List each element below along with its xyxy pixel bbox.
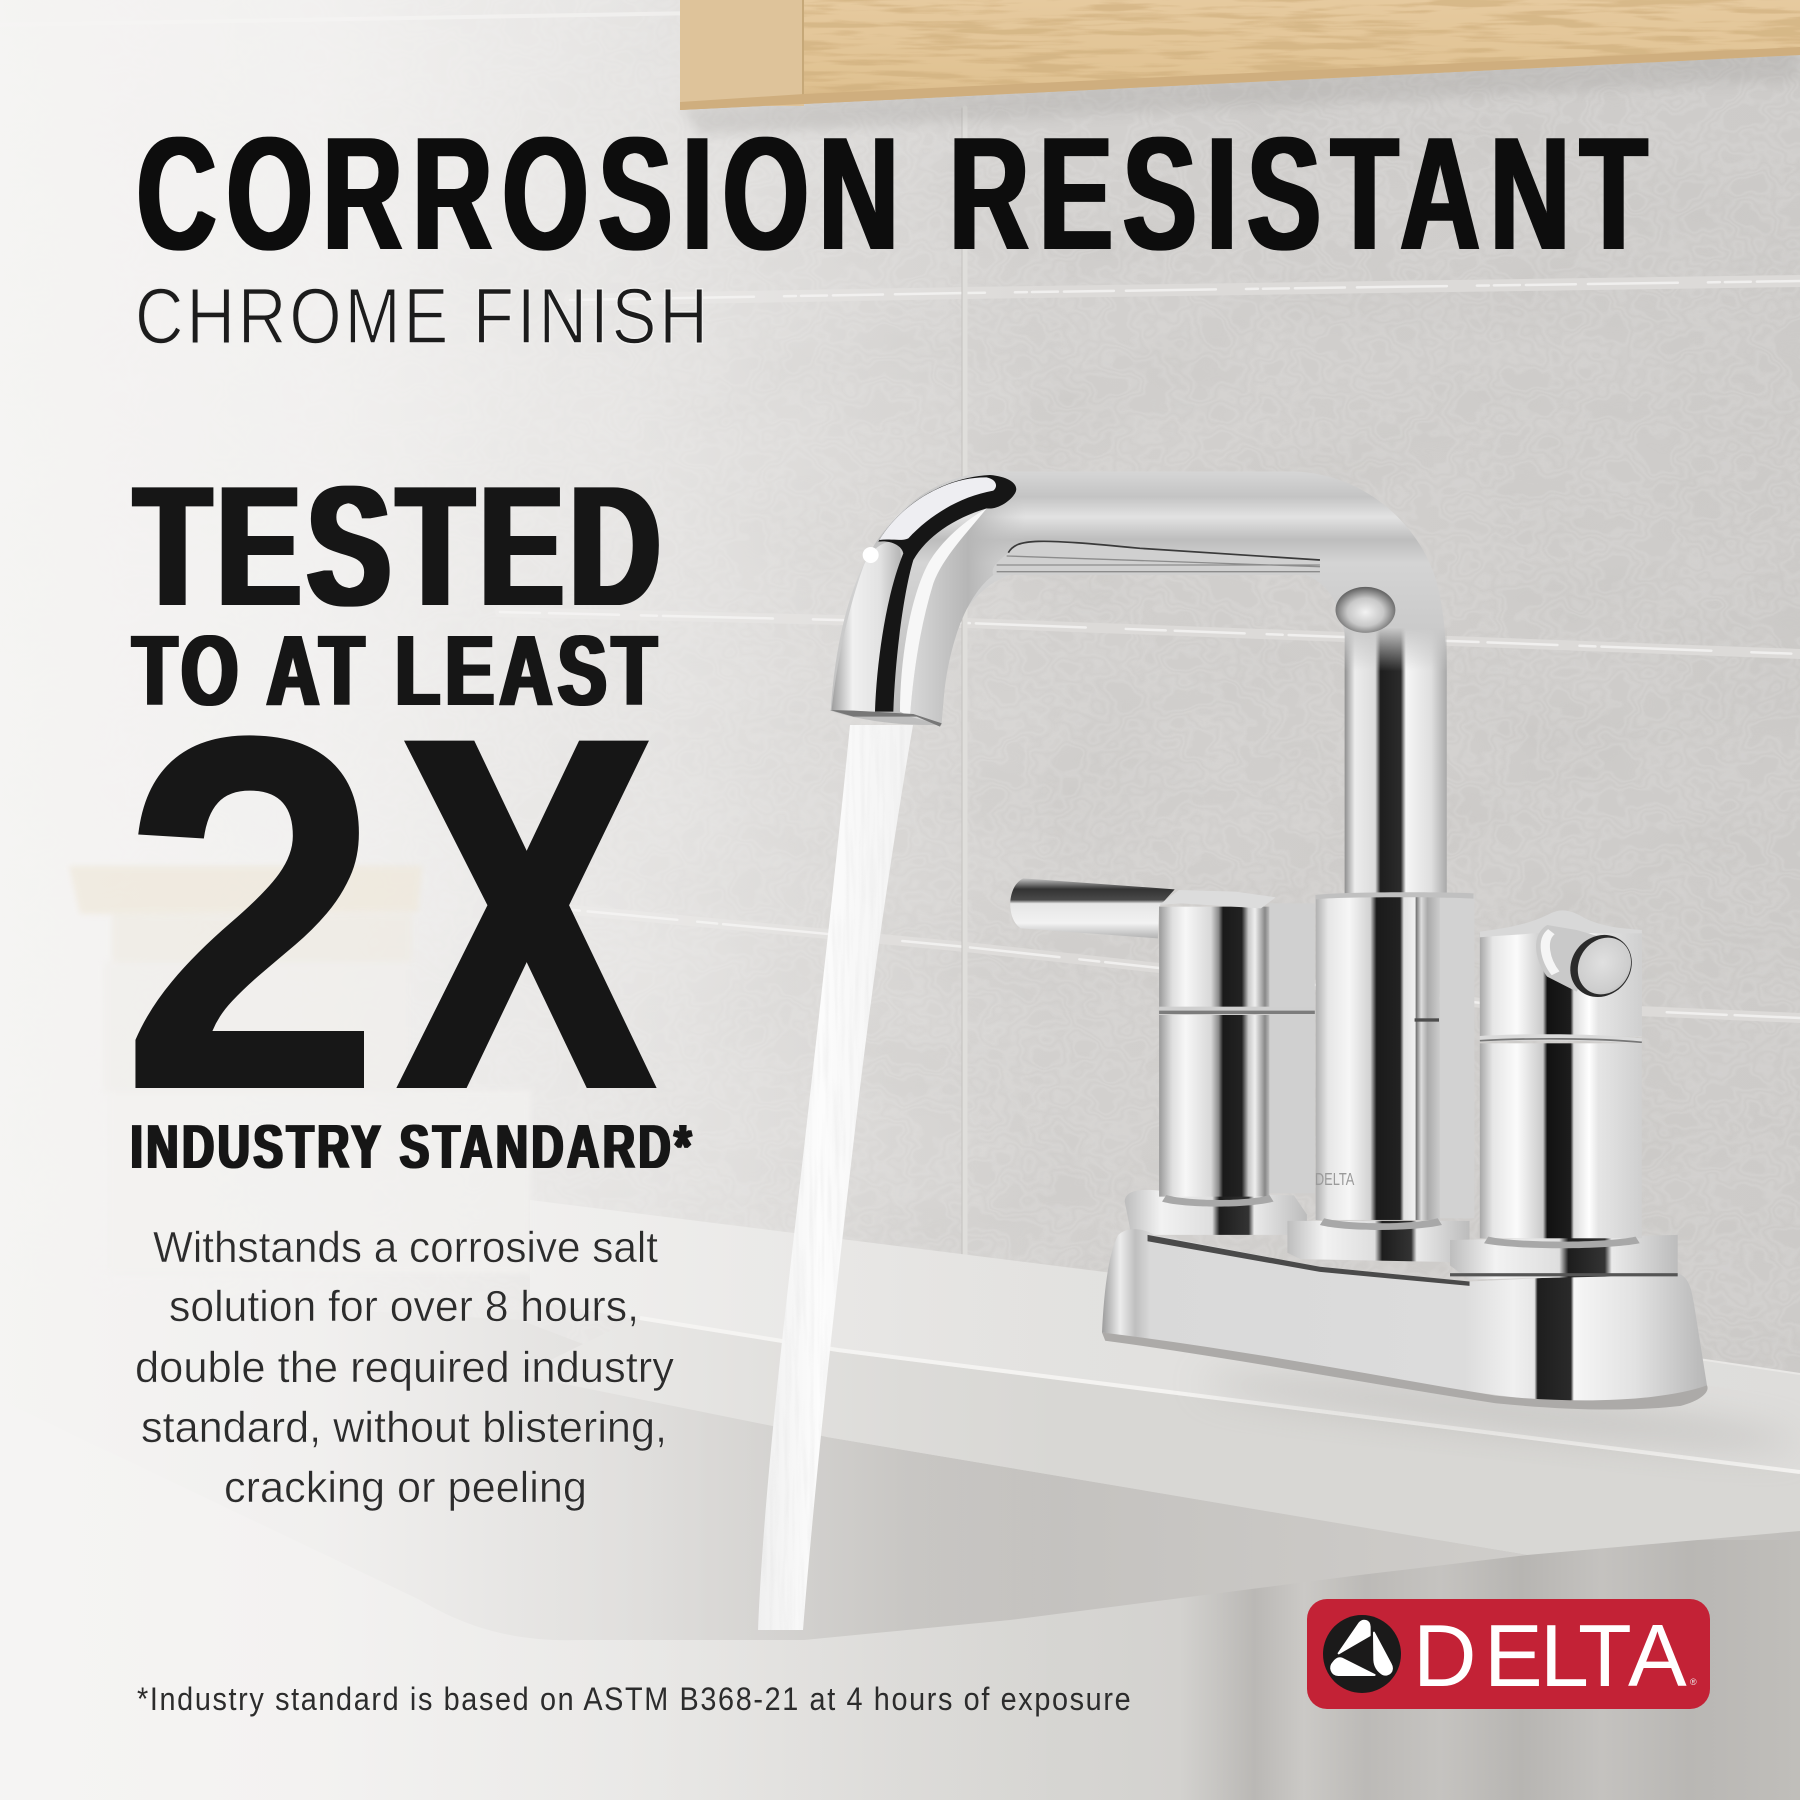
left handle xyxy=(1010,878,1315,1207)
soft fade over left side xyxy=(0,0,1060,1800)
claim: tested to at least 2x industry standard xyxy=(119,450,692,1195)
claim figure: 2: 2 xyxy=(119,630,383,1195)
subtitle: chrome finish: CHROME FINISH xyxy=(135,272,708,360)
jar and box in soft focus xyxy=(69,866,531,1274)
handles and centre body xyxy=(1010,878,1642,1248)
wood cabinet xyxy=(680,0,1800,135)
water stream xyxy=(750,725,920,1630)
description text: solution for over 8 hours, xyxy=(169,1282,639,1331)
claim figure: X: X xyxy=(399,631,656,1195)
engraved DELTA mark: DELTA xyxy=(1315,1169,1355,1189)
right handle xyxy=(1480,910,1642,1248)
claim line: industry standard: INDUSTRY STANDARD* xyxy=(130,1113,692,1182)
title: corrosion resistant: CORROSION RESISTANT xyxy=(136,105,1648,284)
description text: Withstands a corrosive salt xyxy=(153,1223,658,1272)
faucet xyxy=(830,471,1708,1410)
background: bathroom wall xyxy=(0,0,1800,1400)
footnote: *Industry standard is based on ASTM B368-21 at 4 hours of exposure xyxy=(137,1682,1131,1717)
claim line: to at least: TO AT LEAST xyxy=(132,615,657,727)
description text: standard, without blistering, xyxy=(141,1403,667,1452)
vanity counter and sink xyxy=(0,1200,1800,1800)
logo: Delta: ® xyxy=(1690,1677,1697,1687)
description text: double the required industry xyxy=(135,1343,674,1392)
logo: Delta: DELTA xyxy=(1413,1606,1687,1705)
description text xyxy=(135,1223,674,1512)
claim line: tested: TESTED xyxy=(134,450,660,642)
riser collar and centre body xyxy=(1315,892,1474,1230)
spout nose highlights and under-arm reflection xyxy=(830,475,1320,727)
deck plate and base rings xyxy=(1102,1190,1708,1410)
logo: Delta xyxy=(1307,1599,1710,1709)
description text: cracking or peeling xyxy=(224,1463,587,1512)
spout arm and riser xyxy=(831,471,1447,899)
